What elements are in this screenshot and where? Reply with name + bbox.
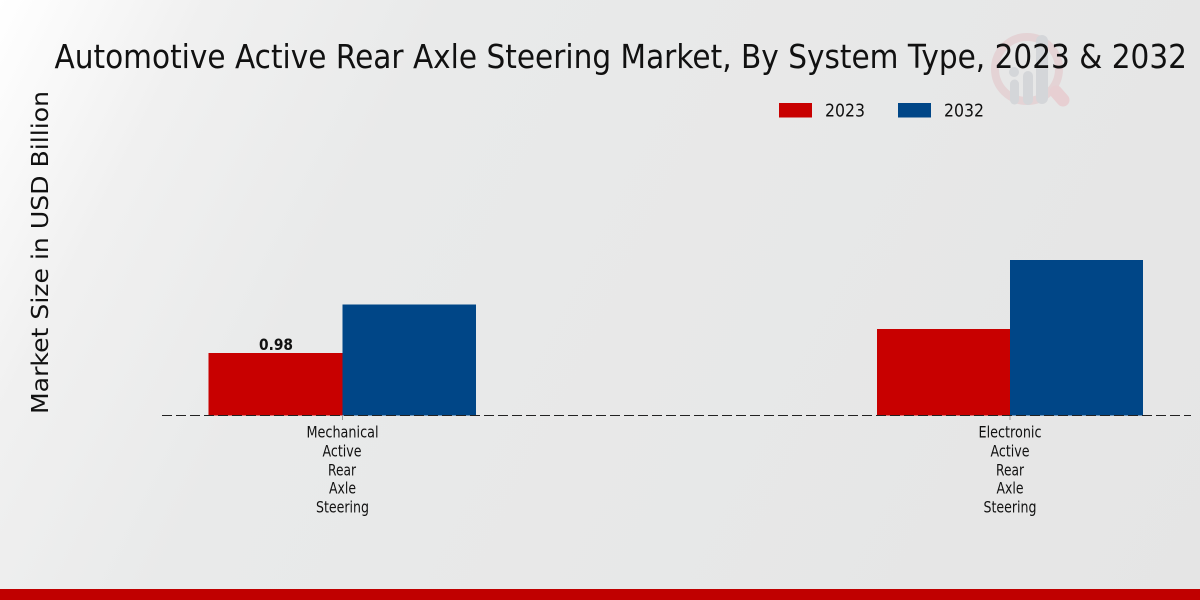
category label: Electronic: Electronic (978, 422, 1042, 442)
legend: 2032: 2032 (944, 100, 984, 122)
category label: Mechanical: Rear (328, 460, 356, 480)
category label: Mechanical: Mechanical (306, 422, 378, 442)
bar chart (162, 260, 1191, 420)
y axis title: Market Size in USD Billion (28, 91, 54, 414)
category label: Electronic: Axle (996, 478, 1024, 498)
category label: Mechanical: Steering (316, 498, 369, 516)
category label: Electronic (978, 422, 1042, 516)
category label: Electronic: Active (990, 442, 1030, 460)
category label: Mechanical: Active (322, 442, 362, 460)
legend: 2032 (898, 100, 984, 122)
baseline (162, 414, 1191, 416)
category label: Electronic: Rear (996, 460, 1024, 480)
category label: Mechanical: Axle (329, 478, 356, 498)
category label: Electronic: Steering (984, 498, 1036, 516)
bars: Electronic Active Rear Axle Steering (877, 260, 1143, 416)
category label: Mechanical (306, 422, 378, 516)
legend (779, 100, 984, 122)
bars: Mechanical Active Rear Axle Steering (208, 304, 476, 416)
legend: 2023 (779, 100, 865, 122)
footer bar (0, 589, 1200, 600)
watermark logo (995, 37, 1063, 101)
value label: 0.98 (259, 335, 293, 354)
legend: 2023: 2023 (825, 100, 865, 122)
